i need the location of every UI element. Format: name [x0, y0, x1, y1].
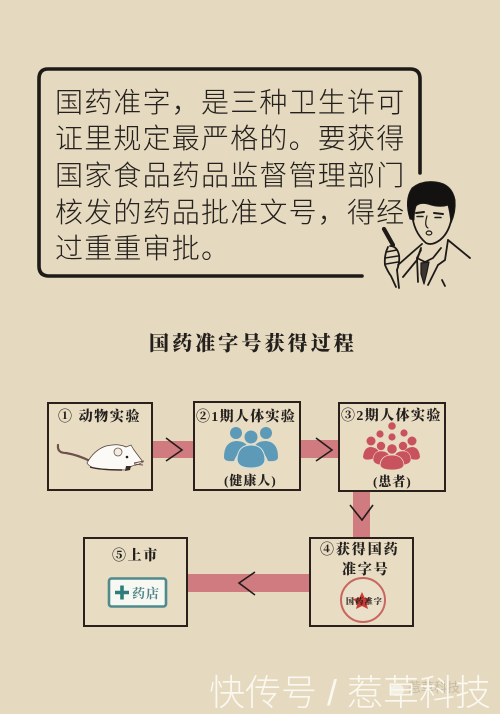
panel: step 5 market [84, 538, 187, 626]
step 5 heading: ⑤上市 [112, 547, 159, 564]
bubble text: 证里规定最严格的。要获得 [55, 123, 405, 154]
step 3 heading: ③2期人体实验 [341, 407, 442, 424]
bubble text: 核发的药品批准文号，得经 [55, 197, 405, 228]
panel: step 4 approval number: 准字号 [342, 561, 390, 578]
speech bubble [39, 69, 420, 276]
arrow: step 3 to 4 [350, 491, 373, 538]
panel: step 4 approval number [310, 538, 413, 626]
bubble text: 国家食品药品监督管理部门 [55, 160, 405, 191]
icon: crowd red [363, 422, 420, 470]
watermark: 快传号 / 惹草科技 [209, 672, 491, 713]
step 3 note: (患者) [373, 474, 412, 489]
icon: three people blue [224, 427, 278, 468]
bubble text: 过重重审批。 [55, 233, 230, 264]
panel: step 1 animal test [48, 403, 152, 490]
arrow: step 1 to 2 [152, 438, 194, 461]
panel: step 3 phase 2 human test [339, 403, 445, 491]
panel: step 2 phase 1 human test [194, 402, 300, 490]
arrow: step 2 to 3 [300, 438, 339, 461]
step 4 heading: ④获得国药 [320, 541, 400, 558]
bubble text: 国药准字，是三种卫生许可 [55, 87, 405, 118]
icon: white mouse [58, 445, 144, 471]
arrow: step 4 to 5 [187, 572, 310, 595]
step 1 heading: ① 动物实验 [58, 408, 141, 425]
bubble text [55, 87, 405, 264]
step 2 heading: ②1期人体实验 [196, 408, 296, 425]
title: 国药准字号获得过程 [149, 331, 357, 355]
icon: pharmacy sign: 药店 [132, 586, 160, 601]
icon: doctor with pen [384, 182, 470, 288]
step 2 note: (健康人) [224, 473, 277, 488]
watermark: 惹草科技 [408, 680, 460, 695]
icon: red seal stamp: 国药准字 [346, 596, 383, 606]
